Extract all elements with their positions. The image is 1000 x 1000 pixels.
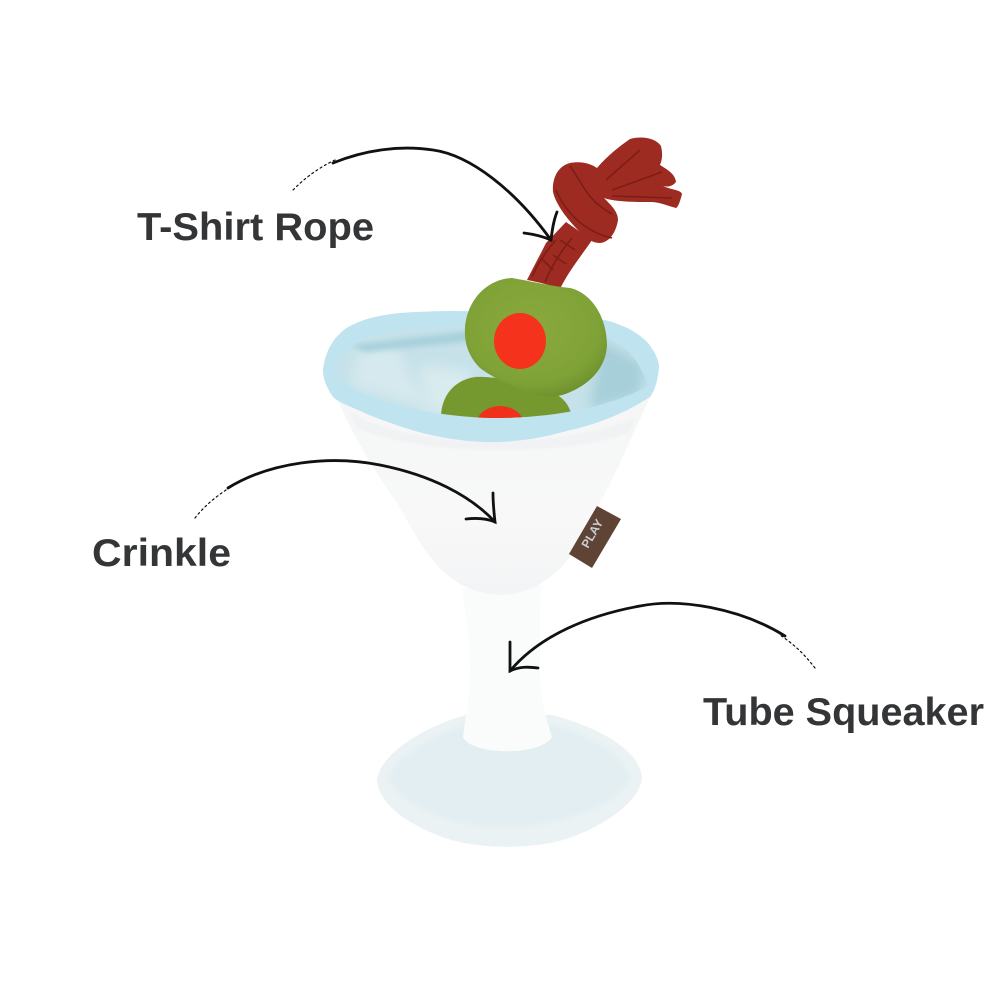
brand tag: PLAY: [578, 517, 606, 550]
arrow: Crinkle: [195, 461, 495, 522]
label: Tube Squeaker: Tube Squeaker: [703, 691, 984, 734]
cup interior: [344, 328, 648, 418]
lower olive: [441, 376, 570, 418]
rope knot and tassel: [553, 137, 682, 243]
glass cup: [336, 395, 650, 595]
arrow: Tube Squeaker: [510, 603, 815, 671]
upper olive: [465, 278, 607, 397]
cup rim: [323, 311, 659, 442]
rope stem: [527, 222, 592, 289]
arrow: T-Shirt Rope: [293, 148, 557, 240]
glass stem: [462, 585, 552, 751]
label: Crinkle: Crinkle: [92, 532, 231, 575]
brand tag: [569, 506, 621, 568]
olive pimento: [494, 313, 546, 369]
illustration: martini glass plush toy: [323, 137, 682, 847]
glass base: [377, 715, 642, 847]
cup under-rim shade: [350, 412, 636, 450]
label: T-Shirt Rope: T-Shirt Rope: [137, 206, 374, 249]
